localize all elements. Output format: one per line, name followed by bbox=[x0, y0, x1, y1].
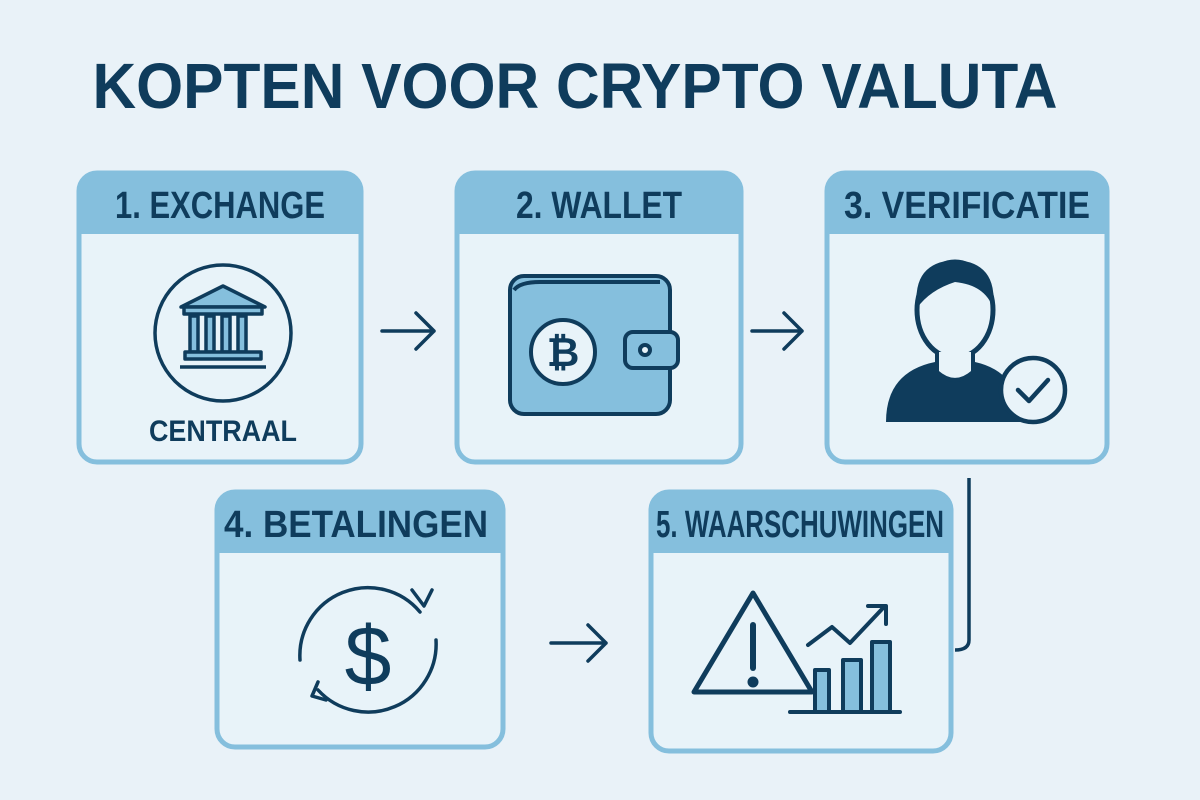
panel: 1 exchange bbox=[79, 173, 361, 462]
arrow 3 bbox=[551, 625, 606, 661]
icon: person with check bbox=[886, 260, 1065, 422]
icon: dollar cycle: $ bbox=[345, 609, 391, 703]
icon: dollar cycle bbox=[300, 588, 436, 712]
title: KOPTEN VOOR CRYPTO VALUTA bbox=[92, 50, 1058, 122]
heading: 1. EXCHANGE: 1. EXCHANGE bbox=[115, 185, 325, 227]
icon: warning with chart bbox=[694, 593, 900, 712]
panel: 3 verificatie bbox=[827, 173, 1107, 462]
panel: 4 betalingen bbox=[217, 492, 503, 747]
heading: 4. BETALINGEN: 4. BETALINGEN bbox=[224, 504, 488, 546]
heading: 5. WAARSCHUWINGEN: 5. WAARSCHUWINGEN bbox=[656, 504, 944, 546]
label: CENTRAAL: CENTRAAL bbox=[149, 415, 297, 448]
arrow 1 bbox=[382, 313, 434, 349]
connector line bbox=[955, 478, 969, 650]
icon: wallet with bitcoin: ₿ bbox=[547, 331, 579, 375]
icon: wallet with bitcoin bbox=[510, 276, 678, 414]
panel: 2 wallet bbox=[457, 173, 741, 462]
heading: 2. WALLET: 2. WALLET bbox=[516, 185, 682, 227]
panel: 5 waarschuwingen bbox=[651, 492, 951, 751]
heading: 3. VERIFICATIE: 3. VERIFICATIE bbox=[844, 185, 1090, 227]
arrow 2 bbox=[752, 313, 802, 349]
icon: bank bbox=[155, 265, 291, 401]
